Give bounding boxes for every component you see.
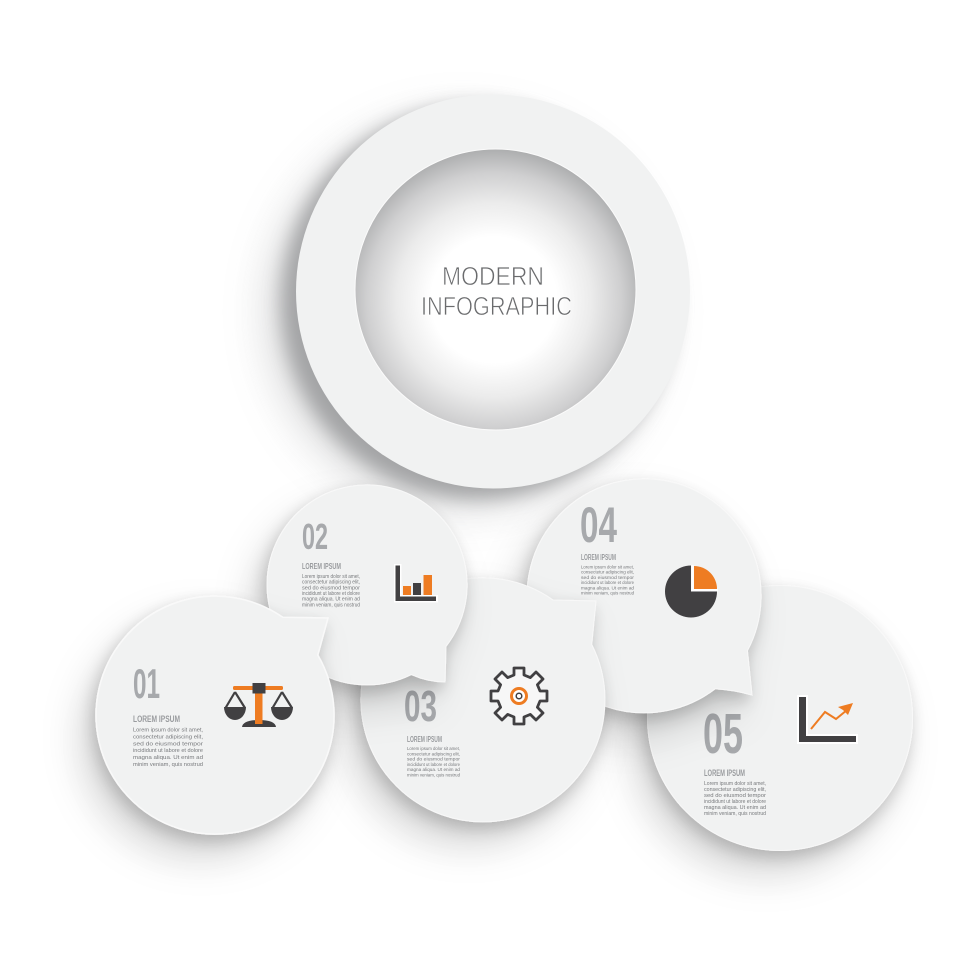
ring body: [296, 94, 690, 488]
body text 01: magna aliqua. Ut enim ad: [133, 755, 203, 761]
number 05: 05: [703, 702, 743, 766]
ring tight cast shadow: [281, 105, 675, 499]
bubble 05: [648, 586, 912, 850]
body text 05: sed do eiusmod tempor: [704, 793, 766, 799]
body text 04: Lorem ipsum dolor sit amet,: [581, 564, 634, 570]
title: [421, 261, 572, 321]
body text 03: sed do eiusmod tempor: [407, 756, 460, 762]
body text 01: [133, 728, 203, 768]
body text 01: consectetur adipiscing elit,: [133, 734, 203, 740]
ring inner well: [355, 149, 636, 430]
bubble 04: [527, 479, 761, 713]
number 01: 01: [133, 660, 160, 707]
heading 01: LOREM IPSUM: [133, 714, 180, 724]
body text 04: magna aliqua. Ut enim ad: [581, 585, 634, 591]
body text 05: magna aliqua. Ut enim ad: [704, 805, 766, 811]
body text 05: incididunt ut labore et dolore: [704, 799, 766, 805]
panel: step 05: [648, 586, 912, 850]
body text 04: minim veniam, quis nostrud: [581, 590, 634, 596]
body text 02: minim veniam, quis nostrud: [302, 602, 360, 608]
body text 05: Lorem ipsum dolor sit amet,: [704, 781, 766, 787]
body text 02: sed do eiusmod tempor: [302, 585, 360, 591]
body text 02: incididunt ut labore et dolore: [302, 591, 360, 597]
heading 05: LOREM IPSUM: [704, 768, 745, 778]
body text 02: consectetur adipiscing elit,: [302, 580, 360, 586]
icon: gear: [491, 668, 547, 724]
body text 05: [704, 781, 766, 817]
body text 01: Lorem ipsum dolor sit amet,: [133, 728, 203, 734]
body text 02: Lorem ipsum dolor sit amet,: [302, 574, 360, 580]
body text 03: incididunt ut labore et dolore: [407, 762, 460, 768]
panel: step 04: [527, 479, 761, 713]
bubble 01: [96, 596, 334, 834]
body text 03: [407, 746, 460, 778]
body text 03: minim veniam, quis nostrud: [407, 772, 460, 778]
body text 03: consectetur adipiscing elit,: [407, 751, 460, 757]
body text 03: magna aliqua. Ut enim ad: [407, 767, 460, 773]
panel: step 02: [267, 485, 467, 685]
heading 03: LOREM IPSUM: [407, 735, 442, 744]
title: MODERN: [442, 261, 544, 291]
number 03: 03: [404, 682, 437, 731]
body text 05: minim veniam, quis nostrud: [704, 811, 766, 817]
body text 04: sed do eiusmod tempor: [581, 575, 634, 581]
panel: step 03: [361, 578, 605, 822]
panel: central ring: [268, 94, 690, 507]
body text 04: [581, 564, 634, 596]
body text 05: consectetur adipiscing elit,: [704, 787, 766, 793]
heading 04: LOREM IPSUM: [581, 553, 616, 562]
body text 01: incididunt ut labore et dolore: [133, 748, 203, 754]
icon: balance scale: [224, 683, 293, 727]
ring wide cast shadow: [268, 117, 658, 507]
bubble 02: [267, 485, 467, 685]
body text 01: minim veniam, quis nostrud: [133, 762, 203, 768]
number 04: 04: [580, 497, 617, 553]
body text 04: incididunt ut labore et dolore: [581, 580, 634, 586]
number 02: 02: [302, 516, 328, 557]
body text 03: Lorem ipsum dolor sit amet,: [407, 746, 460, 752]
bubble 03: [361, 578, 605, 822]
title: INFOGRAPHIC: [421, 291, 572, 321]
heading 02: LOREM IPSUM: [302, 561, 341, 571]
body text 04: consectetur adipiscing elit,: [581, 570, 634, 576]
body text 02: [302, 574, 360, 608]
icon: line chart: [797, 695, 858, 744]
body text 02: magna aliqua. Ut enim ad: [302, 597, 360, 603]
body text 01: sed do eiusmod tempor: [133, 741, 203, 747]
icon: bar chart: [394, 564, 438, 602]
panel: step 01: [96, 596, 334, 834]
icon: pie chart: [665, 565, 718, 618]
